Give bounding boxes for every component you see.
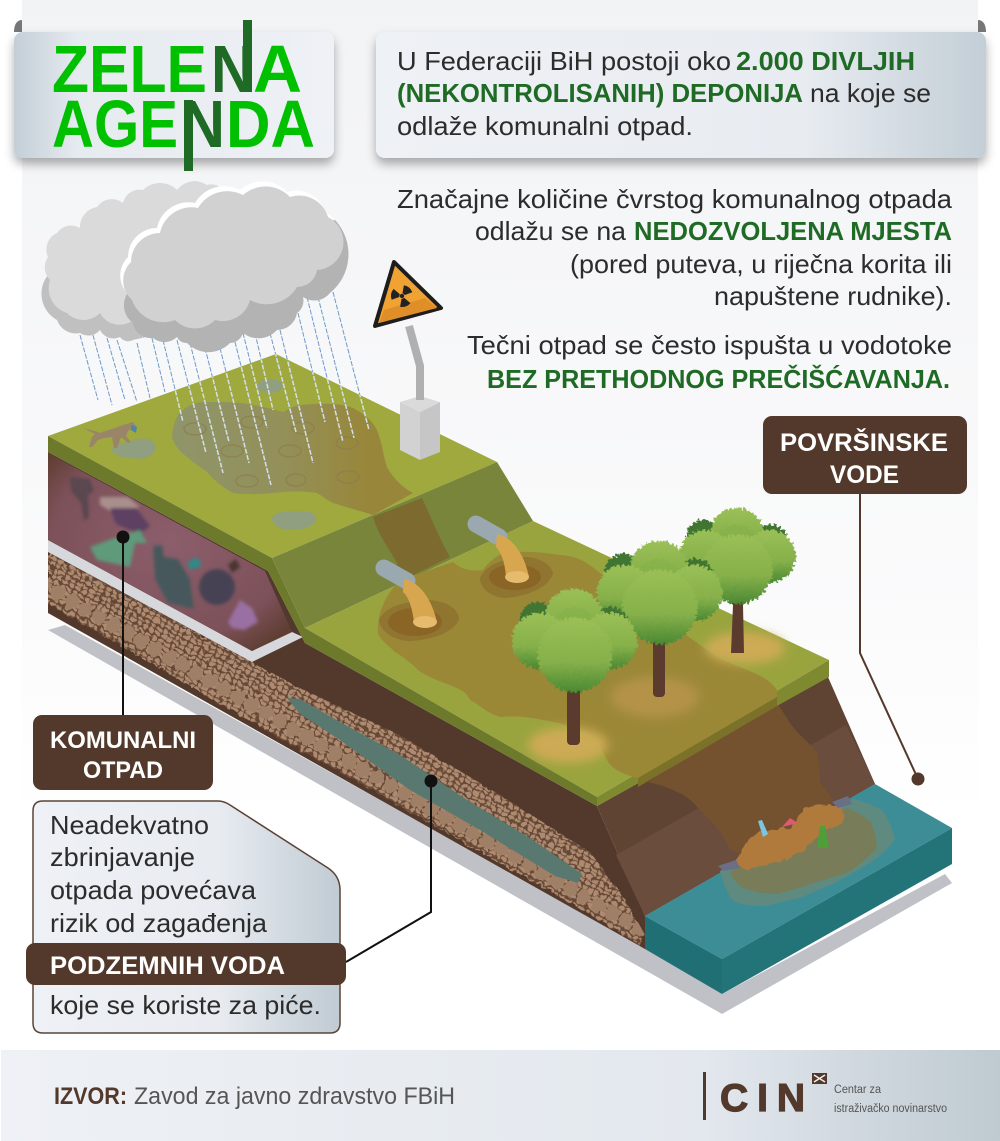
title panel: AGE — [52, 87, 178, 162]
lower terrace — [305, 521, 829, 797]
slope runoff — [373, 498, 450, 583]
title panel: DA — [226, 87, 315, 162]
slope — [272, 462, 533, 628]
soil left face — [48, 452, 645, 949]
text block: tečni otpad — [467, 330, 952, 394]
callout: podzemne vode — [26, 801, 346, 1033]
intro panel: U Federaciji BiH postoji oko — [397, 46, 731, 76]
terrace band right — [597, 660, 829, 806]
callout: podzemne vode: Neadekvatno — [50, 810, 209, 840]
title panel: ZELE — [52, 32, 207, 107]
source: Zavod za javno zdravstvo FBiH — [134, 1083, 455, 1110]
callout: podzemne vode: rizik od zagađenja — [50, 908, 268, 938]
front cloud — [120, 182, 348, 352]
label: površinske vode: POVRŠINSKE — [780, 427, 948, 457]
cloud underside — [124, 220, 348, 352]
pipe pool 2 — [480, 557, 553, 598]
rock layer — [44, 552, 643, 945]
polluted water — [720, 799, 895, 906]
text block: nedozvoljena mjesta: odlažu se na — [475, 216, 627, 246]
title panel — [14, 20, 334, 171]
CIN logo — [703, 1072, 947, 1120]
callout: podzemne vode: koje se koriste za piće. — [50, 990, 321, 1020]
source: IZVOR: — [54, 1083, 127, 1110]
isometric landscape — [44, 262, 952, 1014]
debris pile — [718, 796, 852, 871]
intro panel: (NEKONTROLISANIH) DEPONIJA — [397, 78, 803, 108]
block shadow — [48, 625, 952, 1014]
CIN logo: CIN — [720, 1077, 805, 1120]
contaminated pool on slab — [172, 402, 413, 515]
leader: komunalni otpad — [116, 530, 130, 716]
groundwater — [287, 698, 582, 883]
tree 1 — [513, 590, 636, 745]
pipe 1 — [384, 568, 437, 628]
CIN logo: istraživačko novinarstvo — [834, 1103, 947, 1115]
header fold left — [14, 20, 22, 32]
text block: nedozvoljena mjesta: NEDOZVOLJENA MJESTA — [634, 216, 952, 246]
label: komunalni otpad — [33, 715, 213, 790]
label: površinske vode — [763, 416, 967, 494]
title panel: N — [181, 87, 225, 162]
terrace contamination — [378, 552, 777, 778]
intro panel: na koje se — [810, 78, 931, 108]
leader: površinske vode — [860, 494, 924, 786]
header fold right — [978, 20, 986, 32]
callout: podzemne vode: PODZEMNIH VODA — [50, 952, 285, 980]
label: komunalni otpad: OTPAD — [83, 757, 163, 784]
text block: nedozvoljena mjesta: Značajne količine čvrstog komunalnog otpada — [397, 184, 953, 214]
runoff on right face — [648, 703, 833, 860]
CIN logo: Centar za — [834, 1084, 882, 1096]
pipe pool 1 — [379, 600, 459, 641]
text block: nedozvoljena mjesta: (pored puteva, u riječna korita ili — [570, 249, 952, 279]
callout: podzemne vode: zbrinjavanje — [50, 842, 195, 872]
cloud halo — [120, 182, 340, 323]
text block: nedozvoljena mjesta — [397, 184, 953, 311]
back cloud — [41, 181, 226, 341]
callout: podzemne vode: otpada povećava — [50, 875, 257, 905]
tree 2 — [598, 542, 721, 697]
label: komunalni otpad: KOMUNALNI — [50, 727, 196, 754]
tree 3 — [680, 509, 795, 653]
white liner — [48, 540, 303, 662]
label: površinske vode: VODE — [830, 461, 899, 489]
ponds — [112, 379, 316, 530]
tan tree patches — [528, 632, 785, 763]
water — [645, 784, 952, 994]
pool rings — [184, 416, 359, 487]
sign pole — [409, 326, 420, 400]
text block: tečni otpad: BEZ PRETHODNOG PREČIŠĆAVANJA. — [487, 364, 950, 394]
footer bar — [1, 1050, 1000, 1141]
hazard sign — [375, 262, 441, 326]
sign box — [400, 396, 440, 460]
text block: nedozvoljena mjesta: napuštene rudnike). — [714, 281, 952, 311]
trash pit — [48, 453, 292, 651]
cloud top — [123, 187, 343, 328]
leader: podzemne vode — [346, 774, 438, 962]
terrace band left — [305, 628, 597, 806]
soil right face — [597, 677, 875, 916]
rain — [80, 292, 369, 485]
top slab — [48, 354, 497, 558]
intro panel: 2.000 DIVLJIH — [736, 46, 915, 76]
title panel: A — [253, 32, 302, 107]
dog — [83, 422, 137, 448]
pipe 2 — [476, 524, 529, 583]
intro panel: odlaže komunalni otpad. — [397, 111, 693, 141]
title panel: N — [211, 32, 254, 107]
contaminated band edge — [638, 697, 777, 787]
slab front band — [48, 436, 305, 643]
text block: tečni otpad: Tečni otpad se često ispušta u vodotoke — [467, 330, 952, 360]
intro panel — [376, 32, 986, 158]
